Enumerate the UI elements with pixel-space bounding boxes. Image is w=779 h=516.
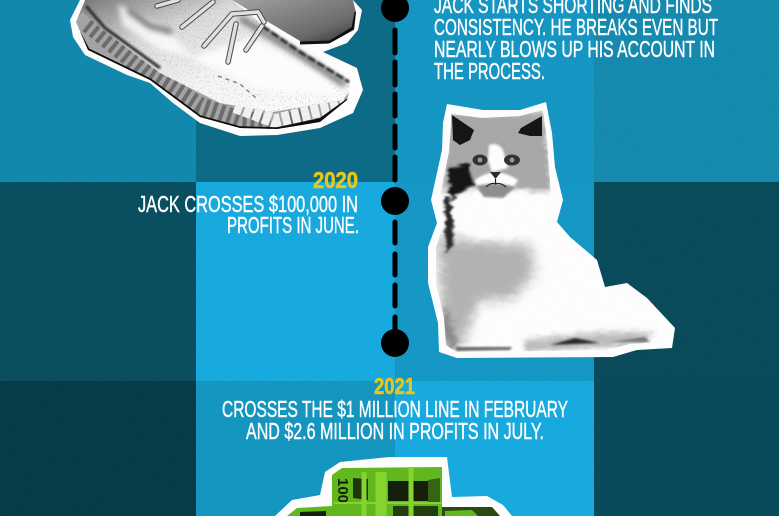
icon: banknote dark print: [300, 478, 440, 516]
banknote denomination: 100: [334, 478, 351, 503]
cat head and body shading: [442, 112, 552, 196]
text block: shorting: [434, 0, 718, 84]
year: 2021: 2021: [374, 373, 415, 399]
icon: cat ears: [452, 115, 542, 145]
text block: 2020 milestone: [138, 191, 359, 238]
text block: 2021 milestone: AND $2.6 MILLION IN PROFITS IN JULY.: [246, 418, 544, 444]
icon: money bands: [334, 467, 442, 516]
year: 2020: 2020: [313, 167, 358, 193]
timeline dot: top: [381, 0, 409, 22]
text block: shorting: THE PROCESS.: [434, 58, 545, 84]
timeline: [381, 0, 409, 357]
icon: green money stack cutout: [275, 457, 512, 516]
icon: sneaker laces: [157, 0, 264, 62]
text block: 2020 milestone: JACK CROSSES $100,000 IN: [138, 191, 358, 217]
timeline dot: 2021: [381, 329, 409, 357]
icon: cat face: [472, 154, 520, 187]
icon: sneakers cutout: [70, 0, 363, 136]
text block: 2021 milestone: [222, 396, 568, 444]
text block: 2021 milestone: CROSSES THE $1 MILLION LINE IN FEBRUARY: [222, 396, 568, 422]
text block: 2020 milestone: PROFITS IN JUNE.: [227, 212, 359, 238]
timeline dot: 2020: [381, 187, 409, 215]
icon: cat cutout: [428, 102, 675, 358]
